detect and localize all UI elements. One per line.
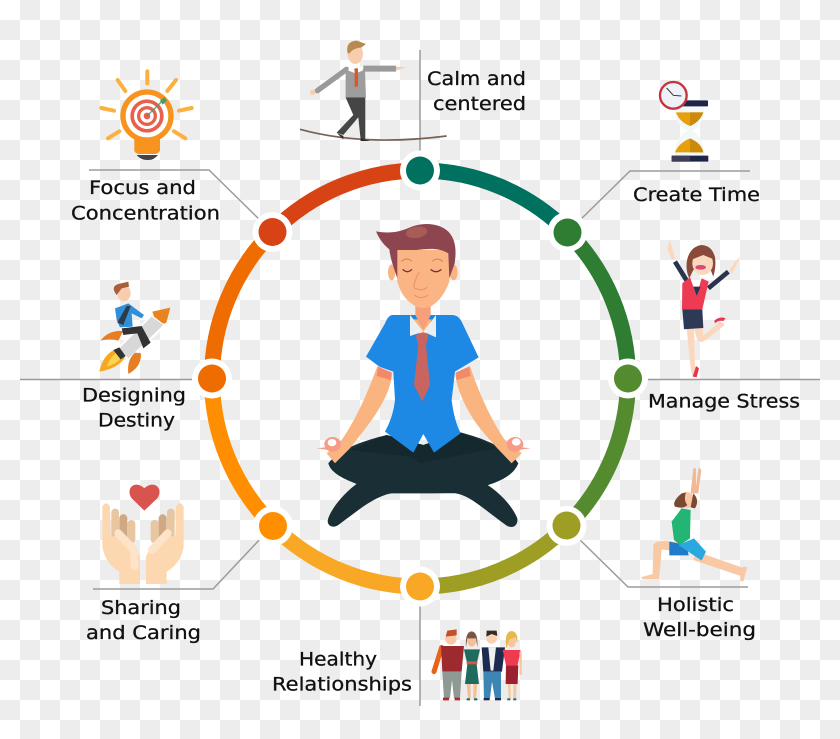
label: Calm and centered: Calm and: [427, 68, 526, 90]
label: Sharing and Caring: Sharing: [101, 597, 181, 619]
label: Sharing and Caring: [86, 597, 201, 644]
label: Calm and centered: [427, 68, 526, 115]
icon: tightrope walker: [300, 41, 447, 141]
label: Healthy Relationships: Relationships: [272, 674, 412, 696]
label: Create Time: Create Time: [633, 184, 760, 206]
label: Calm and centered: centered: [433, 93, 526, 115]
icon: target light bulb: [101, 71, 192, 160]
label: Focus and Concentration: Concentration: [71, 202, 220, 224]
central meditating man: [317, 224, 531, 527]
label: Designing Destiny: [82, 384, 186, 432]
label: Manage Stress: Manage Stress: [648, 390, 800, 412]
icon: jumping woman: [667, 240, 740, 377]
label: Healthy Relationships: Healthy: [299, 648, 377, 670]
ring of coloured arcs: [212, 170, 628, 586]
icon: yoga pose: [641, 467, 747, 582]
label: Designing Destiny: Destiny: [98, 410, 175, 432]
icon: hands with heart: [102, 485, 184, 584]
label: Focus and Concentration: [71, 177, 220, 224]
label: Focus and Concentration: Focus and: [89, 177, 196, 199]
label: Holistic Well-being: Well-being: [643, 619, 756, 641]
label: Healthy Relationships: [272, 648, 412, 696]
icon: man riding rocket: [99, 282, 170, 374]
label: Sharing and Caring: and Caring: [86, 622, 201, 644]
icon: clock and hourglass: [660, 82, 708, 162]
label: Designing Destiny: Designing: [82, 384, 186, 406]
ring nodes: [192, 150, 648, 606]
label: Holistic Well-being: Holistic: [657, 594, 734, 616]
label: Holistic Well-being: [643, 594, 756, 641]
icon: group of four people: [434, 629, 521, 700]
